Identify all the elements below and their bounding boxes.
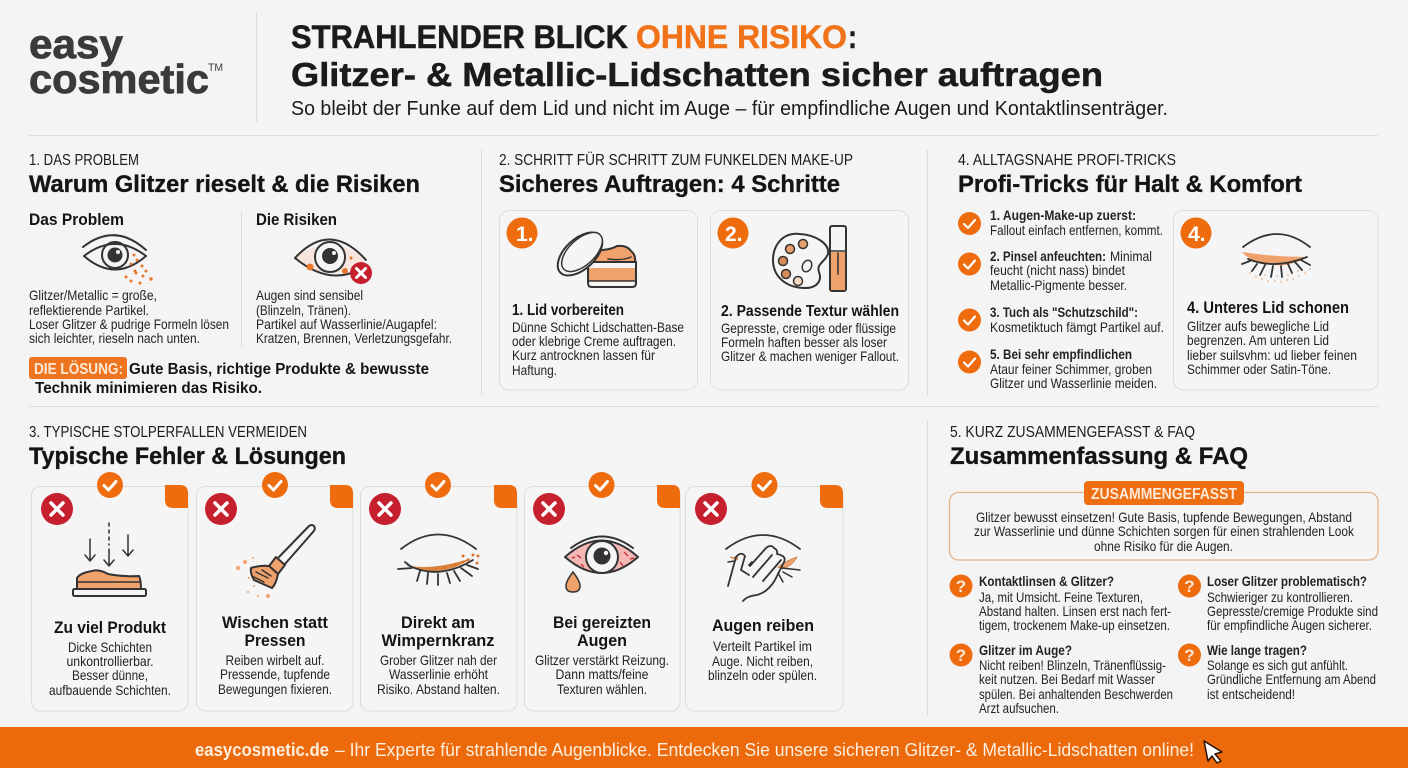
heading 5: Zusammenfassung & FAQ xyxy=(950,443,1248,470)
text: risiken xyxy=(256,287,452,346)
card title: Zu viel Produkt xyxy=(54,618,166,637)
card text: Grober Glitzer nah der xyxy=(380,652,497,668)
faq: kontaktlinsen: Kontaktlinsen & Glitzer? xyxy=(979,573,1114,589)
faq: glitzer im auge: Glitzer im Auge? xyxy=(979,642,1072,658)
faq: glitzer im auge: keit nutzen. Bei Bedarf mit Wasser xyxy=(979,671,1155,687)
footer banner xyxy=(0,727,1408,768)
card: step 2 xyxy=(710,210,908,390)
badge: 1 xyxy=(506,218,538,248)
panel: profi-tricks xyxy=(958,152,1378,391)
step title 4: 4. Unteres Lid schonen xyxy=(1187,298,1349,317)
step text 2: Glitzer & machen weniger Fallout. xyxy=(721,348,899,364)
card text xyxy=(49,639,171,698)
icon: red irritated eye with tear xyxy=(565,536,638,592)
text: problem: reflektierende Partikel. xyxy=(29,302,149,318)
tip 2: 2. Pinsel anfeuchten: xyxy=(990,248,1106,264)
card text: Glitzer verstärkt Reizung. xyxy=(535,652,669,668)
tip 5 xyxy=(958,346,1157,391)
card: augen reiben xyxy=(686,472,843,711)
step text 4: begrenzen. Am unteren Lid xyxy=(1187,332,1329,348)
tip 3: Kosmetiktuch fämgt Partikel auf. xyxy=(990,319,1164,335)
card text: Pressende, tupfende xyxy=(220,666,330,682)
tip 3: 3. Tuch als "Schutzschild": xyxy=(990,304,1138,320)
icon: brush xyxy=(236,525,315,598)
tip 2 xyxy=(958,248,1152,293)
title: STRAHLENDER BLICK xyxy=(291,19,628,55)
card: wischen statt pressen xyxy=(196,472,353,711)
faq: loser glitzer: für empfindliche Augen sicherer. xyxy=(1207,617,1372,633)
card text: Besser dünne, xyxy=(72,667,148,683)
card text xyxy=(218,652,332,697)
text: problem: Loser Glitzer & pudrige Formeln lösen xyxy=(29,316,229,332)
faq: loser glitzer: ? xyxy=(1184,577,1195,596)
card text: Auge. Nicht reiben, xyxy=(712,653,813,669)
panel: typische fehler xyxy=(29,424,843,711)
card: step 1 xyxy=(500,210,698,390)
card text: blinzeln oder spülen. xyxy=(708,667,817,683)
step text 1: Haftung. xyxy=(512,362,557,378)
panel: zusammenfassung und faq xyxy=(950,424,1378,716)
step title 2: 2. Passende Textur wählen xyxy=(721,303,899,320)
step text 1: Dünne Schicht Lidschatten-Base xyxy=(512,319,684,335)
step text 2: Gepresste, cremige oder flüssige xyxy=(721,320,896,336)
heading 1: Warum Glitzer rieselt & die Risiken xyxy=(29,171,420,198)
step text 4: Glitzer aufs bewegliche Lid xyxy=(1187,318,1329,334)
callout: die lösung: DIE LÖSUNG: xyxy=(34,361,123,378)
step text 1: oder klebrige Creme auftragen. xyxy=(512,333,676,349)
badge: 4 xyxy=(1180,218,1212,248)
text: risiken: Augen sind sensibel xyxy=(256,287,363,303)
step text 4: Schimmer oder Satin-Töne. xyxy=(1187,361,1331,377)
card text: Reiben wirbelt auf. xyxy=(226,652,324,668)
icon: cursor xyxy=(1204,741,1222,763)
title: Glitzer- & Metallic-Lidschatten sicher auftragen xyxy=(291,56,1103,93)
text: problem: Glitzer/Metallic = große, xyxy=(29,287,157,303)
faq: glitzer im auge xyxy=(950,642,1173,716)
card text xyxy=(377,652,500,697)
callout: die lösung: Technik minimieren das Risiko. xyxy=(35,380,262,397)
step text 2: Formeln haften besser als loser xyxy=(721,334,887,350)
card text xyxy=(708,638,817,683)
step title 1: 1. Lid vorbereiten xyxy=(512,302,624,319)
card text: Dann matts/feine xyxy=(556,666,649,682)
faq: kontaktlinsen: Ja, mit Umsicht. Feine Texturen, xyxy=(979,589,1143,605)
faq: wie lange tragen: Solange es sich gut anfühlt. xyxy=(1207,657,1348,673)
faq: glitzer im auge: spülen. Bei anhaltenden Beschwerden xyxy=(979,686,1173,702)
card title: Pressen xyxy=(244,631,306,650)
card text: Risiko. Abstand halten. xyxy=(377,681,500,697)
tip 1: Fallout einfach entfernen, kommt. xyxy=(990,222,1163,238)
card text: aufbauende Schichten. xyxy=(49,682,171,698)
card text: Texturen wählen. xyxy=(557,681,647,697)
text: risiken: Kratzen, Brennen, Verletzungsgefahr. xyxy=(256,330,452,346)
faq: kontaktlinsen: Abstand halten. Linsen erst nach fert- xyxy=(979,603,1171,619)
icon: hand rubbing eye xyxy=(726,535,800,601)
text: risiken: Partikel auf Wasserlinie/Augapfel: xyxy=(256,316,437,332)
icon: eye with falling glitter xyxy=(83,235,153,284)
tip 2: feucht (nicht nass) bindet xyxy=(990,262,1125,278)
icon: closed eye with shimmer xyxy=(1242,234,1311,283)
card: direkt am wimpernkranz xyxy=(360,472,517,711)
section label 3: 3. TYPISCHE STOLPERFALLEN VERMEIDEN xyxy=(29,424,307,441)
faq: loser glitzer: Loser Glitzer problematisch? xyxy=(1207,573,1367,589)
summary box: ohne Risiko für die Augen. xyxy=(1094,538,1233,554)
faq: kontaktlinsen xyxy=(950,573,1171,633)
icon: irritated eye with cross xyxy=(295,239,372,284)
title: OHNE RISIKO xyxy=(636,19,847,55)
title: : xyxy=(848,19,857,55)
tip 5: 5. Bei sehr empfindlichen xyxy=(990,346,1132,362)
panel: sicheres auftragen xyxy=(499,151,908,390)
logo: easy cosmetic: easy xyxy=(29,21,123,67)
card text: Bewegungen fixieren. xyxy=(218,681,332,697)
card title xyxy=(222,613,328,650)
logo: easy cosmetic xyxy=(29,21,223,102)
faq: glitzer im auge: Nicht reiben! Blinzeln, Tränenflüssig- xyxy=(979,657,1166,673)
subheading: das problem: Das Problem xyxy=(29,211,124,229)
card text: Wasserlinie erhöht xyxy=(389,666,488,682)
card title: Wimpernkranz xyxy=(382,631,494,650)
section label 4: 4. ALLTAGSNAHE PROFI-TRICKS xyxy=(958,152,1176,169)
callout: die lösung xyxy=(29,357,429,397)
badge: 2: 2. xyxy=(725,223,743,246)
card: zu viel produkt xyxy=(32,472,188,711)
faq: wie lange tragen: ? xyxy=(1184,646,1195,665)
icon: palette and lip gloss xyxy=(773,226,846,291)
faq: wie lange tragen: Wie lange tragen? xyxy=(1207,642,1307,658)
badge: 2 xyxy=(718,218,748,248)
callout: die lösung: Gute Basis, richtige Produkte & bewusste xyxy=(129,361,429,378)
faq: wie lange tragen: Gründliche Entfernung am Abend xyxy=(1207,671,1376,687)
card title xyxy=(382,613,494,650)
summary box: Glitzer bewusst einsetzen! Gute Basis, tupfende Bewegungen, Abstand xyxy=(976,509,1352,525)
footer banner: easycosmetic.de xyxy=(195,740,329,760)
card text: Dicke Schichten xyxy=(68,639,152,655)
tip 2: Minimal xyxy=(1110,248,1152,264)
text: risiken: (Blinzeln, Tränen). xyxy=(256,302,351,318)
step text 4: lieber suilsvhm: ud lieber feinen xyxy=(1187,347,1357,363)
tip 1: 1. Augen-Make-up zuerst: xyxy=(990,207,1136,223)
icon: cream jar xyxy=(550,225,636,287)
panel: das problem xyxy=(29,152,452,397)
summary box: ZUSAMMENGEFASST xyxy=(1091,486,1237,503)
tip 1 xyxy=(958,207,1163,238)
card: step 4 xyxy=(1174,210,1378,390)
tip 5: Glitzer und Wasserlinie meiden. xyxy=(990,375,1157,391)
summary box: zur Wasserlinie und dünne Schichten sorgen für einen strahlenden Look xyxy=(974,523,1355,539)
logo: easy cosmetic: TM xyxy=(208,62,223,74)
card text: unkontrollierbar. xyxy=(66,653,154,669)
badge: 1: 1. xyxy=(516,223,534,246)
summary box xyxy=(950,481,1378,560)
card title: Augen xyxy=(577,631,627,650)
faq: loser glitzer xyxy=(1178,573,1378,633)
tip 5: Ataur feiner Schimmer, groben xyxy=(990,361,1152,377)
logo: easy cosmetic: cosmetic xyxy=(29,56,209,102)
subtitle: So bleibt der Funke auf dem Lid und nicht im Auge – für empfindliche Augen und Kontaktlinsenträger. xyxy=(291,98,1168,120)
tip 3 xyxy=(958,304,1164,335)
icon: glitter on lash line xyxy=(398,534,480,585)
card title: Bei gereizten xyxy=(553,613,651,632)
footer banner: – Ihr Experte für strahlende Augenblicke. Entdecken Sie unsere sicheren Glitzer- & Metallic-Lidschatten online! xyxy=(335,740,1194,760)
card text xyxy=(535,652,669,697)
card title: Direkt am xyxy=(401,613,475,632)
title xyxy=(291,19,1103,93)
card title: Augen reiben xyxy=(712,616,814,635)
faq: kontaktlinsen: tigem, trockenem Make-up einsetzen. xyxy=(979,617,1170,633)
tip 2: Metallic-Pigmente besser. xyxy=(990,277,1127,293)
faq: glitzer im auge: Arzt aufsuchen. xyxy=(979,700,1059,716)
faq: loser glitzer: Schwieriger zu kontrollieren. xyxy=(1207,589,1353,605)
step text 1: Kurz antrocknen lassen für xyxy=(512,347,655,363)
card: bei gereizten augen xyxy=(524,472,680,711)
card text: Verteilt Partikel im xyxy=(713,638,812,654)
heading 4: Profi-Tricks für Halt & Komfort xyxy=(958,171,1302,198)
subheading: die risiken: Die Risiken xyxy=(256,211,337,229)
faq: wie lange tragen xyxy=(1178,642,1376,702)
section label 2: 2. SCHRITT FÜR SCHRITT ZUM FUNKELDEN MAKE-UP xyxy=(499,151,853,169)
icon: too much product xyxy=(73,523,146,596)
text: problem: sich leichter, rieseln nach unten. xyxy=(29,330,200,346)
text: problem xyxy=(29,287,229,346)
section label 5: 5. KURZ ZUSAMMENGEFASST & FAQ xyxy=(950,424,1195,441)
card title: Wischen statt xyxy=(222,613,328,632)
section label 1: 1. DAS PROBLEM xyxy=(29,152,139,169)
step text 4 xyxy=(1187,318,1357,377)
faq: kontaktlinsen: ? xyxy=(956,577,966,596)
faq: glitzer im auge: ? xyxy=(956,646,966,665)
heading 3: Typische Fehler & Lösungen xyxy=(29,443,346,470)
step text 1 xyxy=(512,319,684,378)
card title xyxy=(553,613,651,650)
faq: wie lange tragen: ist entscheidend! xyxy=(1207,686,1295,702)
step text 2 xyxy=(721,320,899,364)
heading 2: Sicheres Auftragen: 4 Schritte xyxy=(499,171,840,198)
badge: 4: 4. xyxy=(1188,223,1206,246)
